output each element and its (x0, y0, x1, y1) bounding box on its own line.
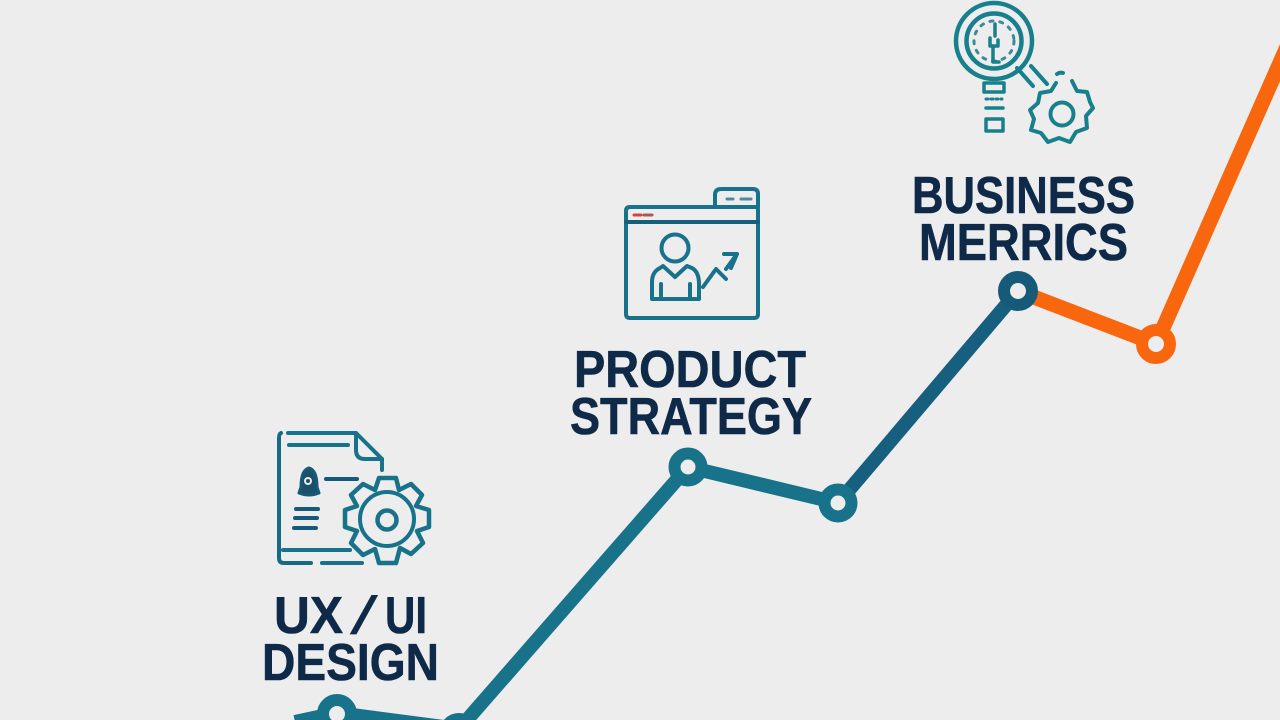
node: product strategy peak (674, 454, 702, 480)
node: business metrics peak (1004, 277, 1032, 305)
heading: Product Strategy: STRATEGY (570, 388, 812, 446)
heading: Business Merrics: MERRICS (919, 214, 1128, 272)
heading: UX/UI Design (262, 587, 439, 692)
node: product strategy dip (824, 490, 852, 516)
icon: document with gear (279, 433, 429, 563)
heading: UX/UI Design: / (346, 587, 381, 645)
growth line: orange segments (1018, 40, 1280, 344)
heading: Product Strategy (570, 341, 812, 446)
icon: magnifier with clock and gear (956, 3, 1093, 142)
heading: Business Merrics (912, 167, 1135, 272)
icon: browser window with person and arrow (626, 189, 758, 318)
node: orange dip (1142, 330, 1170, 358)
heading: Product Strategy: PRODUCT (574, 341, 806, 399)
growth line: teal segments (295, 291, 1018, 720)
heading: Business Merrics: BUSINESS (912, 167, 1135, 225)
node: UX/UI start (323, 700, 351, 720)
heading: UX/UI Design: UX (274, 587, 343, 645)
heading: UX/UI Design: DESIGN (262, 634, 439, 692)
heading: UX/UI Design: UI (385, 587, 427, 645)
node: UX/UI dip (445, 719, 473, 720)
